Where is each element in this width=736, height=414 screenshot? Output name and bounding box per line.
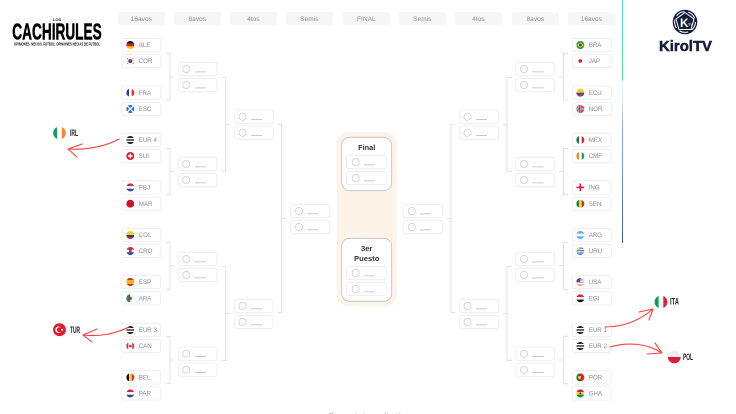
- team POR: POR: [589, 375, 603, 382]
- team NOR: [572, 102, 611, 116]
- team PAR: PAR: [139, 391, 151, 398]
- round headers: Semis: [413, 16, 432, 23]
- team SUI: SUI: [139, 153, 149, 160]
- logo: Los Cachirules: LOS: [53, 17, 61, 22]
- team PBJ: [122, 181, 161, 194]
- logo: KirolTV: [659, 10, 712, 55]
- team ARG: ARG: [589, 232, 602, 239]
- round headers: Semis: [300, 16, 319, 23]
- team PBJ: PBJ: [139, 185, 150, 192]
- arrow: EUR 3 to Turkey: [83, 327, 129, 342]
- panel: centre final area: [337, 132, 397, 306]
- team COL: COL: [139, 232, 152, 239]
- team CRO: [122, 244, 161, 258]
- callout: Italy: ITA: [670, 296, 679, 306]
- round headers: 16avos: [581, 16, 603, 23]
- arrow: EUR 4 to Ireland: [68, 139, 119, 157]
- panel: Final: Final: [358, 143, 375, 152]
- team COL: [122, 228, 161, 242]
- arrow: EUR 2 to Poland: [610, 343, 662, 354]
- team SEN: SEN: [589, 201, 601, 208]
- team CMF: CMF: [589, 153, 602, 160]
- team URU: [572, 244, 611, 258]
- callout: Turkey: [52, 323, 80, 337]
- panel: 3er Puesto: [342, 238, 392, 301]
- team CRO: CRO: [139, 248, 153, 255]
- slots 4tos right: [460, 110, 498, 329]
- round headers: 4tos: [247, 16, 260, 23]
- team CMF: [572, 149, 611, 163]
- arrow: EUR 1 to Italy: [605, 309, 653, 327]
- team SEN: [572, 197, 611, 210]
- team ESC: [122, 102, 161, 116]
- empty slots: left rounds: [178, 62, 330, 376]
- logo: KirolTV: TV: [688, 22, 693, 27]
- team URU: URU: [589, 248, 602, 255]
- bracket connectors: [166, 53, 568, 384]
- logo: Los Cachirules: OPINIONES. NECIOS. FUTBOL. OPINIONES NECIAS DE FUTBOL: [14, 42, 100, 47]
- panel: 3er Puesto: Puesto: [354, 254, 380, 263]
- team ARA: [122, 292, 161, 305]
- team ARA: ARA: [139, 296, 152, 302]
- callout: Poland: [667, 350, 693, 364]
- round headers: 16avos: [131, 16, 153, 23]
- teams: right round of 32: [572, 38, 611, 400]
- team EGI: EGI: [589, 296, 600, 302]
- team BRA: [572, 38, 611, 52]
- team ARG: [572, 228, 611, 242]
- team SUI: [122, 149, 161, 163]
- team MEX: MEX: [589, 137, 602, 144]
- team ESP: [122, 275, 161, 289]
- team EUR 3: EUR 3: [139, 327, 157, 334]
- logo: KirolTV: K: [680, 16, 689, 30]
- team USA: USA: [589, 279, 602, 286]
- team EGI: [572, 292, 611, 305]
- team USA: [572, 275, 611, 289]
- callout: Turkey: TUR: [70, 325, 80, 335]
- team MAR: [122, 197, 161, 210]
- team BEL: BEL: [139, 375, 151, 382]
- team CAN: CAN: [139, 343, 152, 350]
- round headers: 4tos: [472, 16, 485, 23]
- slots semis right: [403, 204, 442, 234]
- team ING: [572, 181, 611, 194]
- team FRA: [122, 86, 161, 99]
- team BRA: BRA: [589, 42, 602, 49]
- team GHA: [572, 387, 611, 400]
- team POR: [572, 371, 611, 384]
- callout: Ireland: IRL: [70, 128, 78, 138]
- callout: Italy: [654, 296, 679, 308]
- team BEL: [122, 371, 161, 384]
- team JAP: JAP: [589, 58, 600, 65]
- team MAR: MAR: [139, 201, 153, 208]
- logo: Los Cachirules: CACHIRULES: [12, 18, 102, 44]
- team ESC: ESC: [139, 106, 152, 113]
- team ECU: ECU: [589, 90, 602, 97]
- team CAN: [122, 339, 161, 353]
- team EUR 1: [572, 323, 611, 337]
- slots 4tos left: [234, 110, 273, 329]
- team EUR 1: EUR 1: [589, 327, 607, 334]
- team ING: ING: [589, 185, 600, 192]
- team JAP: [572, 54, 611, 68]
- team MEX: [572, 133, 611, 147]
- team ESP: ESP: [139, 279, 151, 286]
- slots 8avos right: [516, 62, 554, 376]
- logo: Los Cachirules: [12, 17, 102, 47]
- callout: Ireland: [53, 127, 78, 139]
- panel: Final: [342, 137, 392, 191]
- teams: left round of 32: [122, 38, 161, 400]
- team GHA: GHA: [589, 391, 603, 398]
- team ALE: [122, 38, 161, 52]
- round headers: [118, 12, 615, 25]
- team EUR 3: [122, 323, 161, 337]
- team FRA: FRA: [139, 90, 152, 97]
- team EUR 2: [572, 339, 611, 353]
- slots semis left: [290, 204, 330, 234]
- team EUR 2: EUR 2: [589, 343, 607, 350]
- logo: KirolTV: KirolTV: [659, 38, 712, 55]
- round headers: FINAL: [357, 16, 376, 23]
- team ALE: ALE: [139, 42, 150, 49]
- team ECU: [572, 86, 611, 99]
- slots 8avos left: [178, 62, 217, 376]
- empty slots: right rounds: [403, 62, 554, 376]
- callout: Poland: POL: [683, 352, 693, 362]
- team PAR: [122, 387, 161, 400]
- round headers: 8avos: [526, 16, 545, 23]
- team NOR: NOR: [589, 106, 603, 113]
- panel: 3er Puesto: 3er: [361, 244, 372, 253]
- team EUR 4: EUR 4: [139, 137, 157, 144]
- team EUR 4: [122, 133, 161, 147]
- accent vertical line: [622, 0, 623, 243]
- round headers: 8avos: [188, 16, 207, 23]
- team COR: [122, 54, 161, 68]
- team COR: COR: [139, 58, 153, 65]
